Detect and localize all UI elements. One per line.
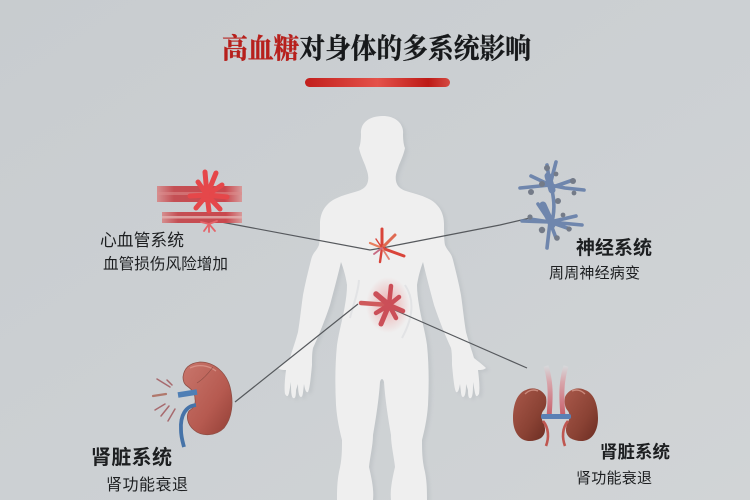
- label: left kidney system: 肾功能衰退: [106, 476, 188, 494]
- small vessel burst: [201, 221, 217, 232]
- icon: abdominal damage burst: [361, 277, 410, 333]
- label: cardiovascular system: 血管损伤风险增加: [103, 255, 228, 273]
- icon: nerve cells: [520, 162, 584, 248]
- title underline bar: [305, 78, 450, 87]
- icon: damaged blood vessels: [157, 172, 242, 232]
- icon: pair of kidneys: [513, 366, 598, 446]
- title: 高血糖对身体的多系统影响: [222, 33, 531, 65]
- label: cardiovascular system: 心血管系统: [100, 231, 184, 250]
- vessel burst: [190, 172, 227, 211]
- label: right kidney system: 肾脏系统: [600, 442, 670, 462]
- label: nervous system: [549, 236, 652, 282]
- label: left kidney system: 肾脏系统: [91, 445, 172, 469]
- upper vessel: [157, 186, 242, 202]
- label: nervous system: 周周神经病变: [549, 265, 640, 282]
- label: left kidney system: [91, 445, 188, 494]
- label: cardiovascular system: [100, 231, 228, 273]
- icon: chest damage burst: [370, 229, 404, 262]
- connector lines: [221, 218, 530, 402]
- icon: left kidney: [153, 362, 232, 447]
- human body silhouette: [278, 116, 489, 500]
- lower vessel: [162, 212, 242, 223]
- label: right kidney system: [576, 442, 670, 487]
- label: right kidney system: 肾功能衰退: [576, 470, 652, 487]
- label: nervous system: 神经系统: [576, 236, 652, 259]
